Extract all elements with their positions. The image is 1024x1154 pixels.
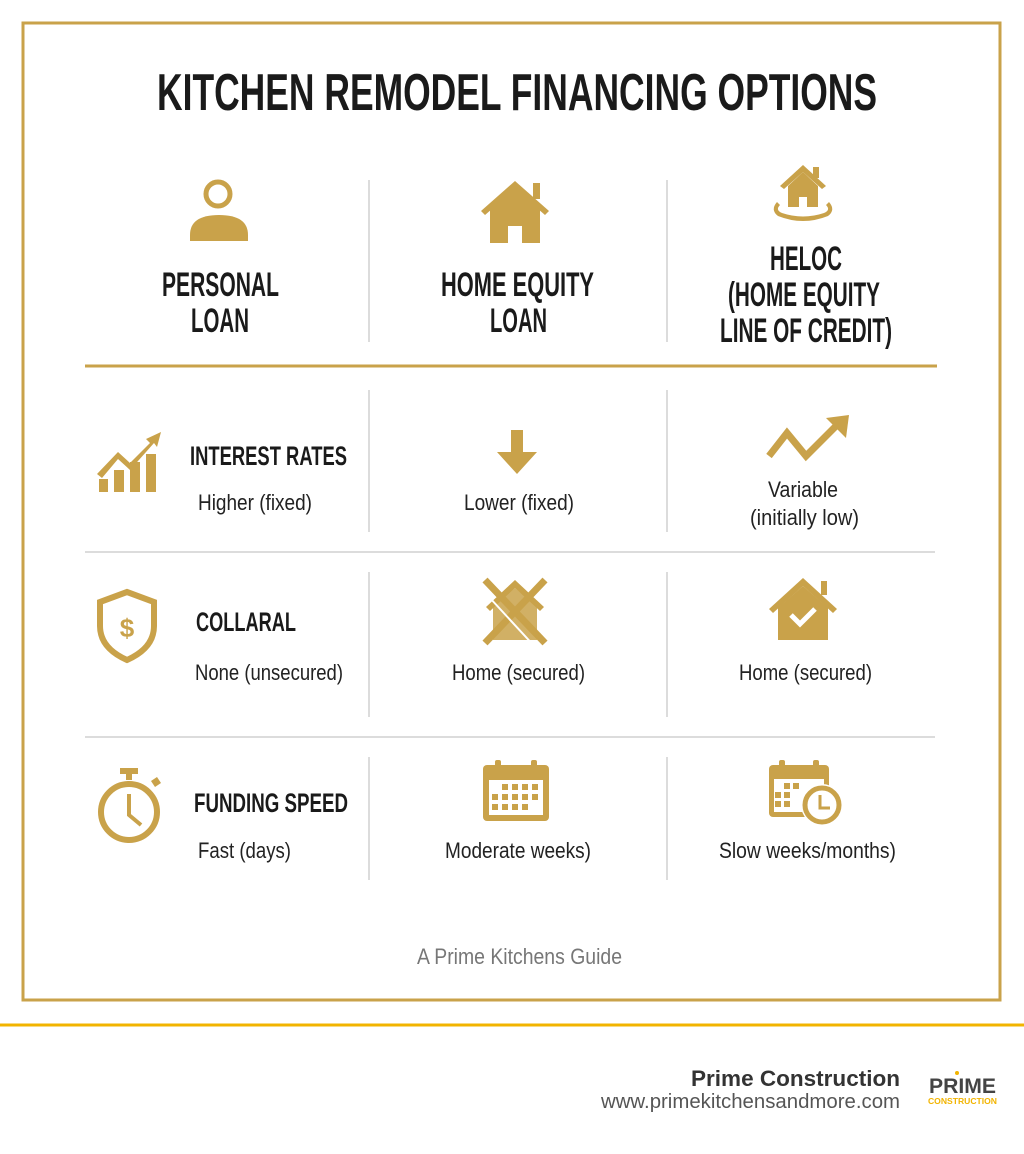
footer: logo: PRIME xyxy=(929,1075,996,1098)
header: personal loan: PERSONAL xyxy=(162,266,279,304)
icon: down arrow xyxy=(497,430,537,474)
header: heloc xyxy=(720,165,892,350)
row: interest rates: Lower (fixed) xyxy=(464,490,574,515)
row: funding speed: Fast (days) xyxy=(198,838,291,863)
row: collateral: Home (secured) xyxy=(739,660,872,685)
header: heloc: LINE OF CREDIT) xyxy=(720,312,892,350)
row: collateral xyxy=(100,578,872,685)
row: funding speed xyxy=(101,760,896,863)
header: home equity loan: LOAN xyxy=(490,302,547,340)
row: interest rates: (initially low) xyxy=(750,505,859,530)
header: personal loan: LOAN xyxy=(191,302,249,340)
icon: house with ring xyxy=(774,165,832,221)
icon: zigzag arrow xyxy=(769,422,840,456)
row: interest rates: Higher (fixed) xyxy=(198,490,312,515)
row: funding speed: Moderate weeks) xyxy=(445,838,591,863)
icon: calendar with clock xyxy=(769,760,843,826)
row: interest rates xyxy=(97,415,859,530)
icon: house xyxy=(481,181,549,243)
row: funding speed: Slow weeks/months) xyxy=(719,838,896,863)
row: funding speed: FUNDING SPEED xyxy=(194,788,348,818)
footer: company xyxy=(600,1066,900,1113)
icon: house check xyxy=(769,578,837,640)
row: collateral: Home (secured) xyxy=(452,660,585,685)
icon: shield dollar: $ xyxy=(120,613,135,643)
header: heloc: HELOC xyxy=(770,240,842,278)
icon: crossed house xyxy=(478,580,545,648)
icon: person xyxy=(190,182,248,241)
header: home equity loan: HOME EQUITY xyxy=(441,266,594,304)
row: collateral: COLLARAL xyxy=(196,607,296,637)
row: collateral: None (unsecured) xyxy=(195,660,343,685)
header: personal loan xyxy=(162,182,279,340)
guide caption: A Prime Kitchens Guide xyxy=(417,944,622,969)
icon: rising chart xyxy=(97,432,161,492)
header: heloc: (HOME EQUITY xyxy=(728,276,880,314)
footer: company: www.primekitchensandmore.com xyxy=(600,1091,900,1113)
footer: logo xyxy=(928,1071,997,1106)
footer: company: Prime Construction xyxy=(691,1066,900,1091)
row: interest rates: INTEREST RATES xyxy=(190,441,347,471)
icon: shield dollar xyxy=(100,592,154,660)
icon: stopwatch xyxy=(101,768,161,840)
footer: logo: CONSTRUCTION xyxy=(928,1097,997,1106)
icon: calendar xyxy=(483,760,549,821)
header: home equity loan xyxy=(441,181,594,340)
row: interest rates: Variable xyxy=(768,477,838,502)
